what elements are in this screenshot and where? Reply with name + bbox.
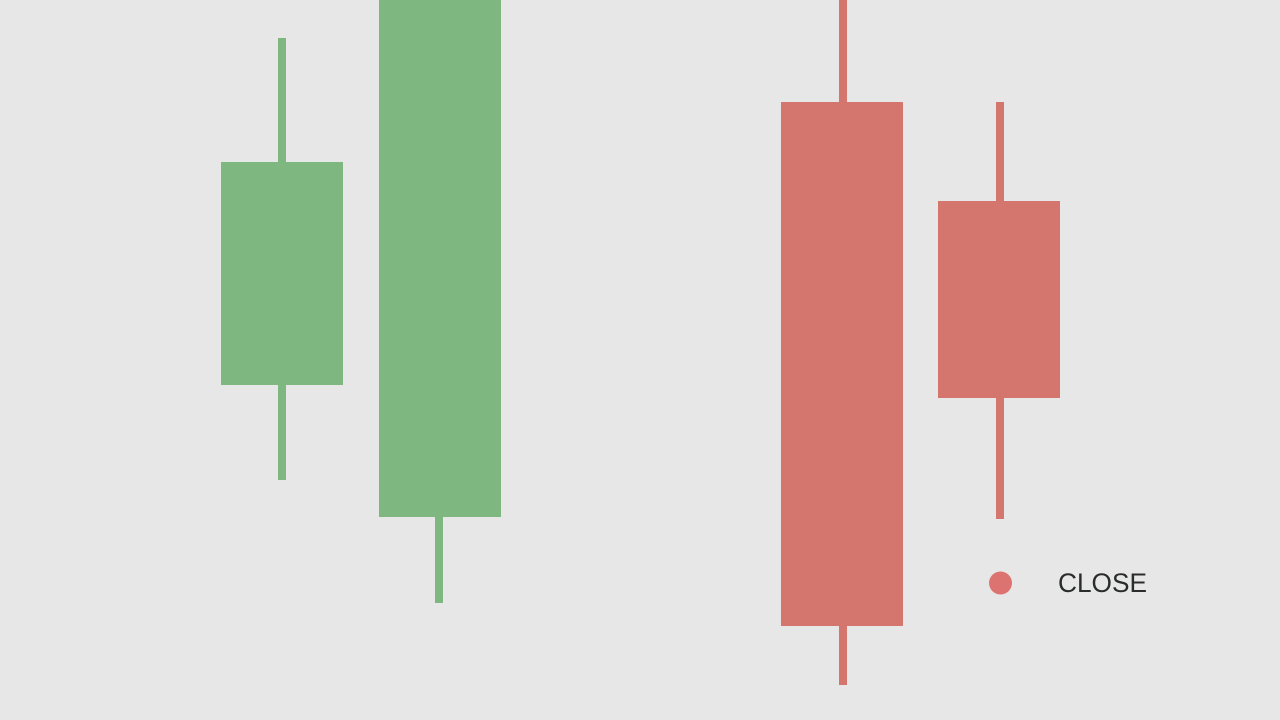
green candlestick 2 [379, 0, 501, 603]
red candlestick 1 [781, 0, 903, 685]
green candlestick 1 [221, 38, 343, 480]
red candlestick 2 [938, 102, 1060, 519]
legend: close [989, 568, 1147, 598]
legend dot [989, 572, 1012, 594]
legend label: CLOSE [1058, 568, 1147, 598]
